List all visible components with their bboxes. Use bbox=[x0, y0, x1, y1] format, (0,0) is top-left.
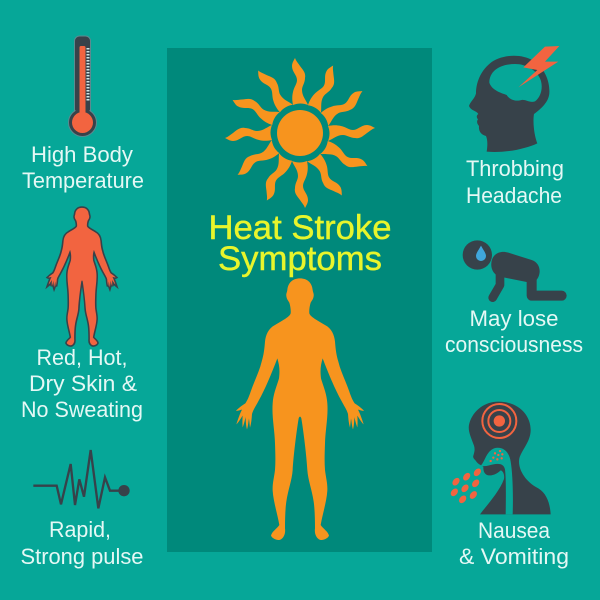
icon: sun bbox=[225, 58, 375, 208]
label: rapid, strong pulse: Strong pulse bbox=[20, 544, 144, 569]
center panel bbox=[167, 48, 432, 552]
label: red, hot, dry skin: Red, Hot, bbox=[36, 345, 128, 370]
icon: orange human body bbox=[236, 278, 364, 540]
label: high body temperature: High Body bbox=[31, 142, 133, 167]
icon: head with lightning bbox=[469, 46, 559, 152]
label: red, hot, dry skin: Dry Skin & bbox=[29, 371, 137, 396]
icon: vomiting head bbox=[449, 402, 551, 514]
label: red, hot, dry skin bbox=[21, 345, 143, 422]
title: Symptoms bbox=[218, 240, 382, 278]
label: may lose consciousness: consciousness bbox=[445, 332, 583, 357]
icon: crawling person bbox=[463, 240, 562, 298]
label: nausea and vomiting: & Vomiting bbox=[459, 544, 569, 569]
label: throbbing headache: Headache bbox=[466, 183, 562, 208]
label: red, hot, dry skin: No Sweating bbox=[21, 397, 143, 422]
label: may lose consciousness bbox=[445, 306, 583, 357]
icon: thermometer bbox=[68, 36, 96, 136]
title: Heat Stroke bbox=[208, 209, 392, 247]
icon: pulse line bbox=[33, 450, 130, 508]
icon: red human body bbox=[48, 208, 116, 345]
label: nausea and vomiting bbox=[459, 518, 569, 569]
label: high body temperature: Temperature bbox=[22, 168, 144, 193]
label: high body temperature bbox=[22, 142, 144, 193]
label: rapid, strong pulse: Rapid, bbox=[49, 517, 111, 542]
label: may lose consciousness: May lose bbox=[470, 306, 558, 331]
label: rapid, strong pulse bbox=[20, 517, 144, 569]
label: nausea and vomiting: Nausea bbox=[478, 518, 551, 543]
label: throbbing headache bbox=[466, 156, 564, 208]
title bbox=[208, 209, 392, 278]
label: throbbing headache: Throbbing bbox=[466, 156, 564, 181]
